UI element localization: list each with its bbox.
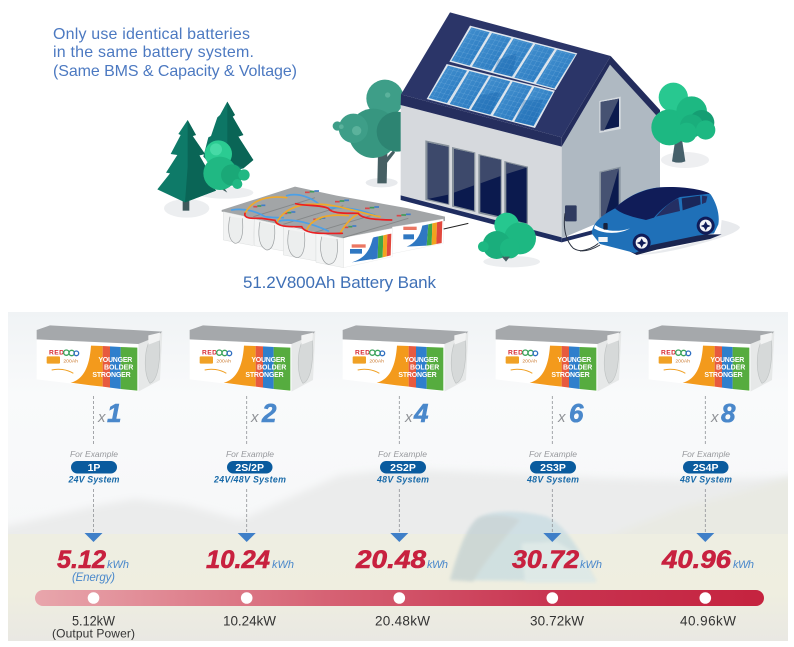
battery 5: RED bbox=[661, 349, 676, 356]
output power labels: 10.24kW bbox=[223, 614, 276, 628]
intro note: in the same battery system. bbox=[53, 44, 254, 61]
configuration labels: For Example bbox=[682, 449, 730, 459]
energy values bbox=[57, 546, 754, 584]
battery 4: 200Ah bbox=[522, 359, 537, 365]
quantity multipliers: x bbox=[404, 409, 413, 426]
roof bbox=[401, 12, 611, 137]
battery 3: STRONGER bbox=[398, 372, 437, 379]
battery bank title: 51.2V800Ah Battery Bank bbox=[243, 273, 436, 292]
power scale bar bbox=[35, 590, 764, 606]
left wall bbox=[401, 105, 562, 238]
battery 2: YOUNGER bbox=[251, 357, 285, 364]
energy values: kWh bbox=[107, 559, 129, 571]
battery 1 bbox=[37, 325, 162, 392]
panel: capacity scale background bbox=[0, 312, 794, 641]
output power labels: (Output Power) bbox=[52, 626, 135, 640]
output power labels: 20.48kW bbox=[375, 614, 430, 628]
battery 4 bbox=[496, 325, 621, 392]
quantity multipliers: 6 bbox=[569, 398, 584, 428]
intro note: Only use identical batteries bbox=[53, 26, 250, 43]
battery 5: 200Ah bbox=[675, 359, 690, 365]
battery 4: BOLDER bbox=[563, 365, 592, 372]
configuration labels: For Example bbox=[529, 449, 577, 459]
illustration: round tree bbox=[333, 80, 417, 187]
tent bbox=[450, 512, 597, 583]
intro note bbox=[53, 26, 297, 80]
energy values: kWh bbox=[427, 559, 448, 571]
output power labels: 5.12kW bbox=[72, 614, 115, 628]
intro note: (Same BMS & Capacity & Voltage) bbox=[53, 63, 297, 80]
energy values: kWh bbox=[580, 559, 602, 571]
output power labels bbox=[52, 614, 736, 640]
battery 5: STRONGER bbox=[704, 372, 743, 379]
dashed connector arrows bbox=[94, 396, 705, 533]
gable windows bbox=[599, 97, 621, 218]
quantity multipliers: 1 bbox=[107, 398, 121, 428]
gable wall bbox=[562, 64, 660, 238]
quantity multipliers: x bbox=[710, 409, 719, 426]
quantity multipliers: 4 bbox=[413, 398, 429, 428]
battery 1: YOUNGER bbox=[98, 357, 132, 364]
wiring bbox=[232, 195, 392, 234]
energy values: 40.96 bbox=[661, 546, 732, 574]
battery 2: 200Ah bbox=[216, 359, 231, 365]
battery 3: RED bbox=[355, 349, 370, 356]
battery bank bbox=[222, 187, 468, 268]
configuration labels: 2S2P bbox=[390, 462, 416, 474]
cable to house bbox=[444, 223, 468, 229]
lid labels bbox=[253, 191, 411, 227]
battery 4: STRONGER bbox=[551, 372, 590, 379]
illustration: house with solar roof bbox=[401, 12, 660, 251]
configuration labels bbox=[68, 449, 732, 484]
battery 3: 200Ah bbox=[369, 359, 384, 365]
energy values: 30.72 bbox=[512, 546, 579, 574]
energy values: kWh bbox=[272, 559, 294, 571]
quantity multipliers: x bbox=[97, 409, 106, 426]
configuration labels: For Example bbox=[70, 449, 118, 459]
solar panels bbox=[427, 26, 577, 128]
quantity multipliers: 2 bbox=[261, 398, 277, 428]
energy values: 5.12 bbox=[57, 546, 106, 574]
output power labels: 40.96kW bbox=[680, 614, 736, 628]
configuration labels: 48V System bbox=[376, 474, 429, 484]
arrowheads bbox=[84, 533, 714, 542]
energy values: kWh bbox=[733, 559, 754, 571]
configuration labels: 24V/48V System bbox=[213, 474, 286, 484]
energy values: (Energy) bbox=[72, 572, 115, 584]
battery 5: BOLDER bbox=[716, 365, 745, 372]
configuration labels: 2S3P bbox=[540, 462, 566, 474]
battery 2 bbox=[190, 325, 315, 392]
illustration: electric car bbox=[580, 187, 740, 255]
quantity multipliers: 8 bbox=[721, 398, 736, 428]
configuration labels: 2S4P bbox=[693, 462, 719, 474]
configuration labels: For Example bbox=[378, 449, 427, 459]
energy values: 10.24 bbox=[206, 546, 270, 574]
battery 1: BOLDER bbox=[104, 365, 133, 372]
battery 3: YOUNGER bbox=[404, 357, 438, 364]
battery 1: RED bbox=[49, 349, 64, 356]
battery 5: YOUNGER bbox=[710, 357, 744, 364]
battery 3: BOLDER bbox=[410, 365, 439, 372]
battery 2: BOLDER bbox=[257, 365, 286, 372]
illustration: right tree bbox=[651, 83, 715, 168]
quantity multipliers: x bbox=[557, 409, 566, 426]
quantity multipliers: x bbox=[250, 409, 259, 426]
end faces with handles bbox=[223, 212, 344, 268]
illustration: pine trees and bush bbox=[157, 102, 253, 218]
battery 2: STRONGER bbox=[245, 372, 284, 379]
battery 4: YOUNGER bbox=[557, 357, 591, 364]
battery 4: RED bbox=[508, 349, 523, 356]
battery 5 bbox=[649, 325, 774, 392]
configuration labels: 1P bbox=[88, 462, 100, 474]
quantity multipliers bbox=[97, 398, 736, 428]
configuration labels: For Example bbox=[226, 449, 274, 459]
illustration: front bush bbox=[478, 213, 540, 267]
long side faces bbox=[344, 219, 443, 268]
battery 1: 200Ah bbox=[63, 359, 78, 365]
configuration labels: 24V System bbox=[68, 474, 120, 484]
energy values: 20.48 bbox=[355, 546, 426, 574]
output power labels: 30.72kW bbox=[530, 614, 584, 628]
battery 2: RED bbox=[202, 349, 217, 356]
battery top lines bbox=[253, 198, 408, 238]
configuration labels: 2S/2P bbox=[235, 462, 264, 474]
wall charger and cable bbox=[564, 205, 600, 251]
configuration labels: 48V System bbox=[679, 474, 732, 484]
battery 1: STRONGER bbox=[92, 372, 131, 379]
configuration labels: 48V System bbox=[526, 474, 579, 484]
ground windows bbox=[425, 140, 528, 224]
battery 3 bbox=[343, 325, 468, 392]
